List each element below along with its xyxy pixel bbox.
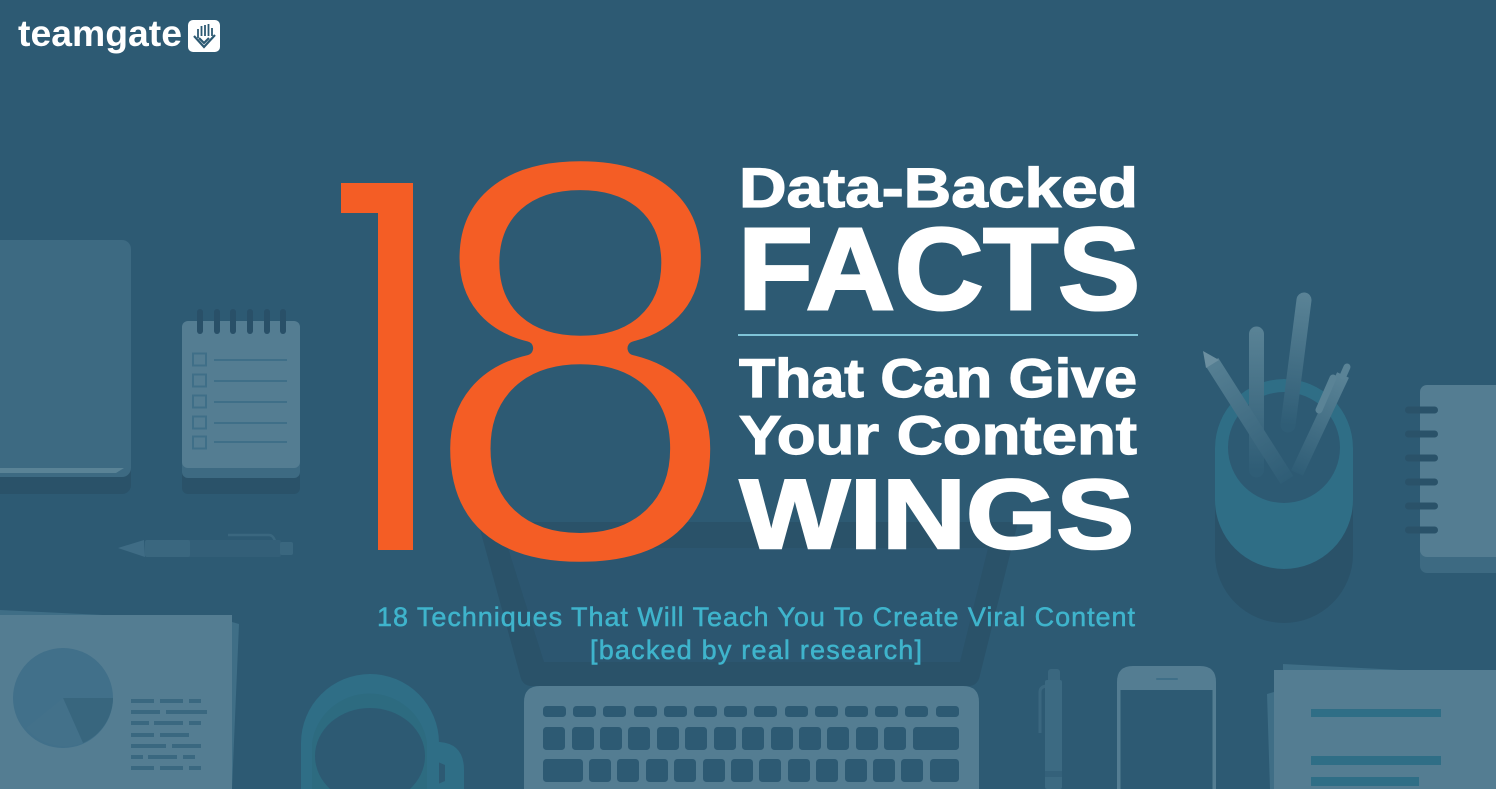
- big number 18: 8: [406, 53, 755, 691]
- title text: [738, 156, 1140, 569]
- pie chart: [13, 648, 113, 748]
- icon: laptop: [478, 522, 1018, 789]
- title text: FACTS: [738, 204, 1140, 334]
- big number 18: [341, 161, 710, 562]
- icon: spiral notebook: [1405, 385, 1496, 573]
- icon: pen lying flat: [118, 535, 293, 557]
- icon: pen holder with pencils: [1203, 300, 1353, 623]
- icon: coffee mug: [301, 674, 464, 789]
- big number 18: 1: [242, 71, 537, 663]
- subtitle: 18 Techniques That Will Teach You To Create Viral Content: [377, 602, 1135, 632]
- title text: WINGS: [740, 459, 1134, 569]
- icon: document sheets: [1267, 664, 1496, 789]
- subtitle: [377, 602, 1135, 665]
- title text: That Can Give: [739, 347, 1137, 409]
- title text: Your Content: [739, 404, 1137, 466]
- logo: teamgate: teamgate: [18, 13, 182, 54]
- keyboard: [524, 686, 979, 789]
- logo icon: hand: [188, 20, 220, 52]
- icon: closed book: [0, 240, 131, 494]
- title text: Data-Backed: [739, 156, 1138, 219]
- icon: upright pen: [1040, 669, 1062, 789]
- subtitle: [backed by real research]: [590, 635, 922, 665]
- icon: report sheet with pie chart: [0, 610, 239, 789]
- icon: smartphone: [1117, 666, 1216, 789]
- icon: checklist notepad: [182, 309, 300, 494]
